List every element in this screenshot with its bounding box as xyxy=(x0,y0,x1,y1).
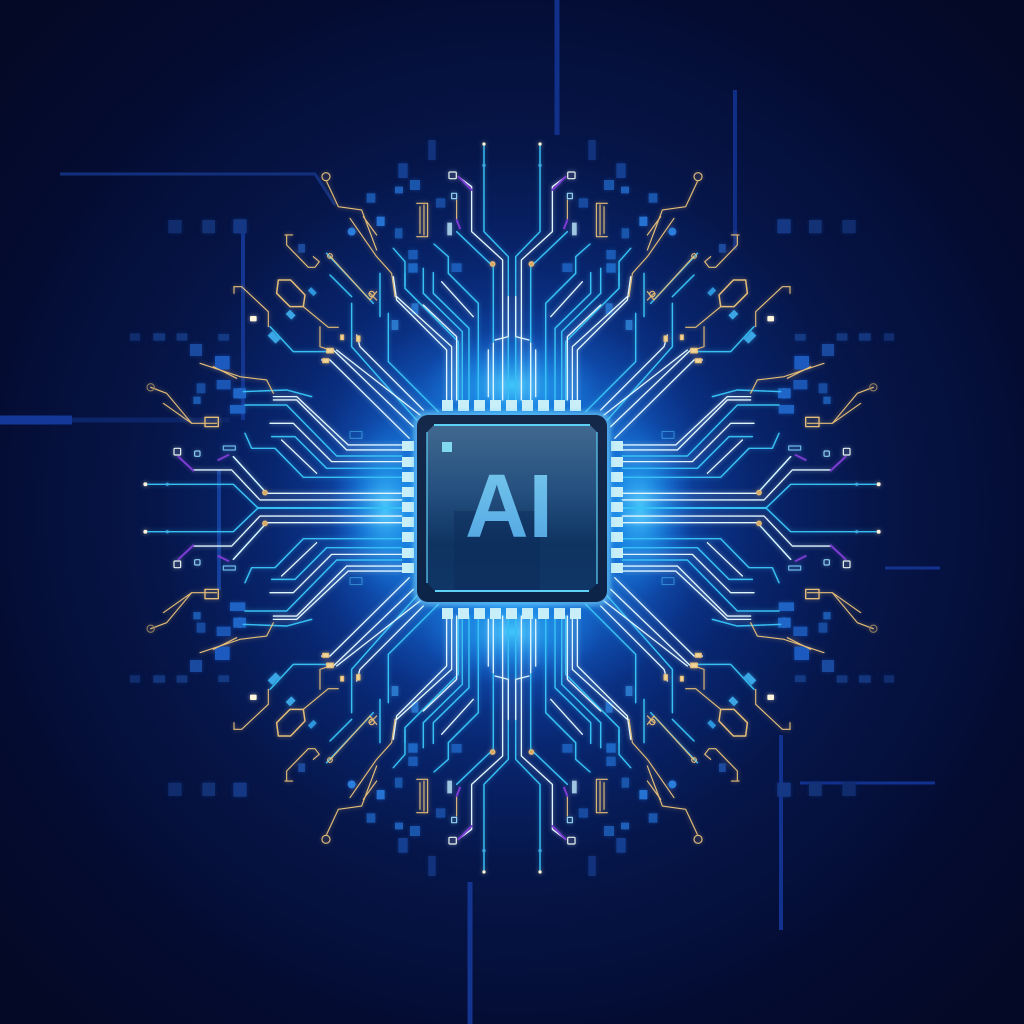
chip face xyxy=(427,425,597,591)
chip face edge light xyxy=(427,425,597,591)
chip halo xyxy=(413,411,611,606)
AI label: AI xyxy=(465,457,553,557)
circuit traces: bottom-right quadrant xyxy=(516,508,894,876)
chip body xyxy=(417,415,607,602)
chip marker square xyxy=(442,442,452,452)
circuit traces: top-right quadrant xyxy=(516,140,894,508)
top connector pads xyxy=(442,400,581,411)
AI chip xyxy=(413,411,611,606)
chip face lower shading xyxy=(454,511,540,591)
bottom connector pads xyxy=(442,608,581,619)
circuit traces: top-left quadrant xyxy=(130,140,508,508)
soft glow around chip xyxy=(307,303,717,713)
right connector pads xyxy=(611,441,623,573)
left connector pads xyxy=(402,441,414,573)
trace glow layer xyxy=(130,140,894,876)
circuit traces: bottom-left quadrant xyxy=(130,508,508,876)
